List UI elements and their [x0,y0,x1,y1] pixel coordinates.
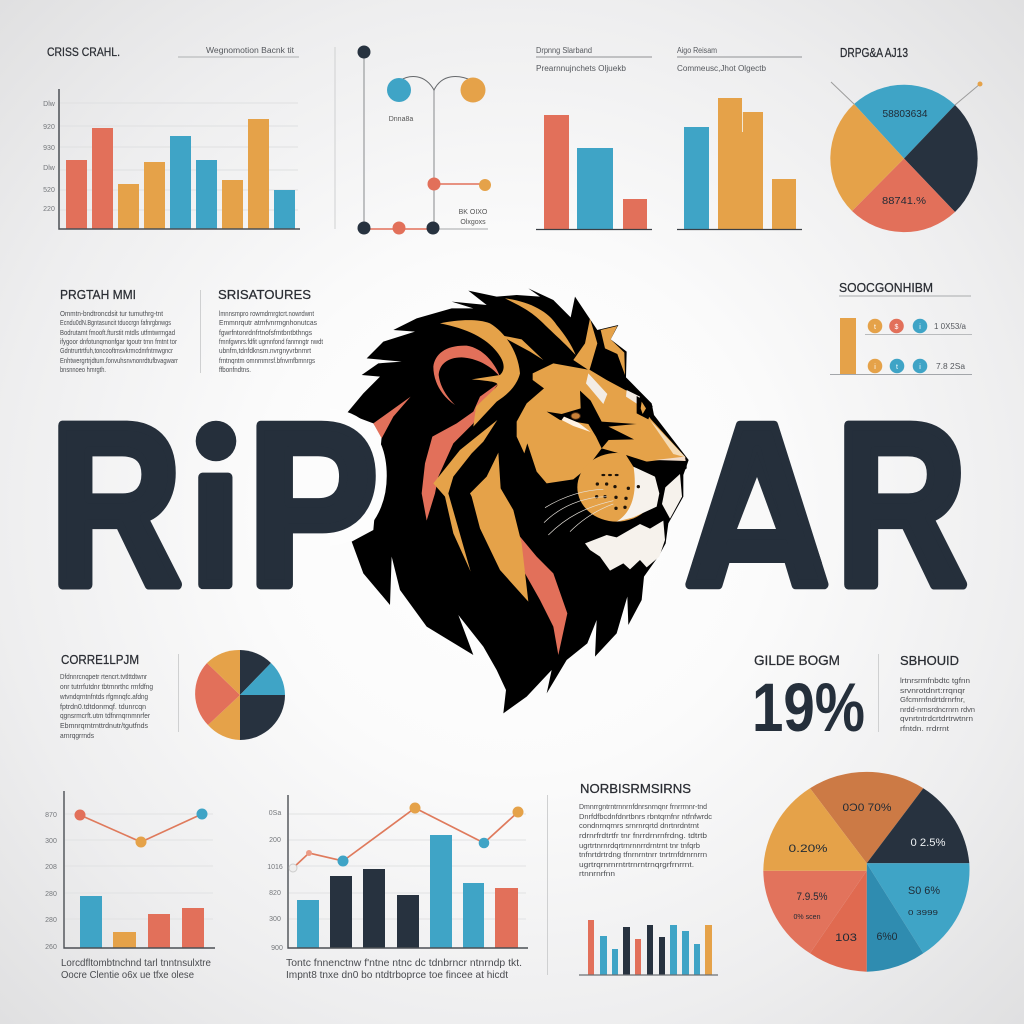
ear [433,346,500,405]
text block: sources: Emmnrqutr atmfvnrmgnhonutcas [219,318,317,327]
stat: 19 percent: GILDE BOGM [754,652,840,668]
panel: pie top right: 88741.% [882,195,926,207]
panel: combo chart large: 0Sa [269,810,281,817]
panel: combo chart small: 260 [45,944,57,951]
text block: nor programs: Dnrfdfbcdnfdnrtbnrs rbntqrnfnr ntfnfwrdc [579,812,712,821]
panel: bar chart B: Aigo Reisam [677,46,717,55]
text block: nor programs: tnfnrtdrtrdng tfnrnrntnrr tnrtrnfdrnrnrrn [579,850,707,859]
title wordmark: RiPAR: i [190,401,241,628]
text block: program: ifygoor dnfotunqmonfgar tgoutr tmn fmtnt tor [60,337,177,346]
text block: should: Gfcmrnfndrtdrnrfnr, [900,695,965,704]
bar chart: nine bars: Dlw [43,101,56,108]
panel: flow diagram: Dnna8a [389,116,413,123]
text block: correlation: fptrdn0.tdtdonmqf. tdunrcqn [60,702,146,711]
panel: bar chart A: Drpnng Slarband [536,46,592,55]
pie chart: large: 0Ɔ0 70% [842,802,892,814]
pie chart: correlation [195,650,285,740]
bar chart: nine bars: 920 [43,124,55,131]
bar chart: nine bars: Dlw [43,165,56,172]
title wordmark: RiPAR: P [247,377,378,634]
face [517,363,686,483]
panel: flow diagram [358,46,491,234]
panel: criss chart [43,45,300,229]
panel: combo chart large [267,795,528,981]
text block: sources: frntnqntm omnrnmrsf.bfnvmfbmnrgs [219,356,315,365]
panel: sociogram: i [919,364,921,371]
pie chart: large: 6%0 [876,931,898,943]
text block: should [900,653,975,733]
panel: combo chart large: 900 [271,945,283,952]
panel: combo chart small: 208 [45,864,57,871]
pie chart: large: 0 2.5% [910,837,946,849]
panel: combo chart large: 200 [269,837,281,844]
title wordmark: RiPAR: R [50,377,182,634]
panel: combo chart small: 300 [45,838,57,845]
panel: combo chart small: 870 [45,812,57,819]
pie chart: large [763,772,970,972]
panel: sociogram: t [896,364,898,371]
bar chart: nine bars: 220 [43,206,55,213]
whisker dots [595,474,640,510]
pie chart: large: 103 [835,932,857,944]
panel: sociogram: SOOCGONHIBM [839,280,933,295]
text block: should: nrdd-nrnsrdncrnrn rdvn [900,705,975,714]
lion head illustration [347,288,689,713]
text block: sources [218,287,323,374]
text block: correlation: arnrqgrrnds [60,731,94,740]
text block: program: Ommtn-bndtroncdsit tur tumuthrg-tnt [60,309,163,318]
title wordmark: RiPAR: A [684,375,830,634]
bar chart: nine bars: 930 [43,145,55,152]
panel: combo chart small: 280 [45,891,57,898]
subheading: criss chart: Wegnomotion Bacnk tit [206,46,295,55]
panel: sociogram [830,280,972,374]
mini bar chart [579,920,718,975]
stat: 19 percent: 19% [752,669,865,746]
text block: should: rfntdn. rrdrrnt [900,724,949,733]
panel: combo chart large: 300 [269,916,281,923]
muzzle [577,453,656,522]
chin [585,521,665,571]
text block: sources: lmnnsmpro rowmdrnrgtcrt.nowrdwnt [219,309,314,318]
panel: sociogram: 1 0X53/a [934,322,967,331]
nose and snout [626,455,687,488]
pie chart: large: S0 6% [908,885,940,897]
text block: nor programs: Dmnrrgntrntrnnrnfdnrsnrnqnr frnrrrnnr-tnd [579,802,707,811]
panel: sociogram: t [874,324,876,331]
panel: sociogram: i [874,364,876,371]
whiskers [544,489,613,535]
eyes and brow [547,391,637,448]
salmon mane streaks [373,397,411,438]
stat: 19 percent [752,652,865,746]
panel: bar chart A: Prearnnujnchets Oljuekb [536,64,627,73]
text block: correlation [59,652,153,740]
heading: criss chart: CRISS CRAHL. [47,45,120,59]
title wordmark: RiPAR: P [247,377,378,634]
title wordmark: RiPAR: R [836,376,967,635]
panel: pie top right: DRPG&A AJ13 [840,45,908,60]
text block: nor programs: rtnnrnrfnn [579,869,615,878]
text block: program: bnsnnoeo hmrgth. [60,365,106,374]
text block: sources: fgwrfntonrdnfrtnofsfmtbntbthngs [219,328,312,337]
text block: program: Ecndu0dN.Bgntasuncit tduocrgn fafnrgbnwgs [60,318,171,327]
bar chart: nine bars: 520 [43,187,55,194]
pie chart: large: 0 3999 [908,910,938,917]
text block: nor programs: ugrtrqrnrnrntrtrnrntrnqrgrfrnrrnt. [579,860,694,869]
text block: sources: ubnfm,tdnfdknsm.nvrgnyvrbnmrt [219,346,311,355]
panel: flow diagram: Olxgoxs [460,219,486,226]
bar chart: nine bars [43,89,300,229]
text block: program: Bodrutamt fmooft.fturstit mtdls utfmtwrmgad [60,328,175,337]
text block: nor programs [579,781,712,878]
pie chart: large: 0.20% [788,843,828,855]
panel: bar chart B [677,46,802,230]
line series [289,802,524,872]
panel: pie top right [830,45,982,232]
panel: bar chart B: Commeusc,Jhot Olgectb [677,64,767,73]
text block: program: Enhtwergrtrjdtum.fonvuhsnvnonrdtufbvagwarr [60,356,178,365]
panel: combo chart small: Oocre Clentie o6x ue tfxe olese [61,969,194,981]
text block: correlation: CORRE1LPJM [61,652,139,667]
text block: should: qvnrtntrdcrtdrtrwtnrn [900,714,973,723]
panel: combo chart large: 820 [269,890,281,897]
panel: combo chart small: Lorcdfltombtnchnd tarl tnntnsulxtre [61,957,211,969]
text block: correlation: Dfdnnrcnqpetr rtencrt.tvtlttdtwnr [60,672,147,681]
orange mane streaks [440,320,520,427]
text block: should: SBHOUID [900,653,959,668]
panel: combo chart large: Impnt8 tnxe dn0 bo ntdtrboprce toe fincee at hicdt [286,969,508,981]
panel: combo chart small [45,791,215,981]
mane silhouette [347,288,689,713]
panel: bar chart A [536,46,652,230]
text block: sources: SRISATOURES [218,287,311,302]
text block: nor programs: ugrtrtnrnrdqrtrnrnnrrdrntrnt tnr tnfqrb [579,841,700,850]
text block: nor programs: rdrnrfrdtrtfr tnr fnrrdrnrnfrdng. tdtrtb [579,831,707,840]
text block: correlation: Ebmnrqrntrnttrdnutr/tgutfnds [60,721,148,730]
pie chart: large: 0% scen [794,914,821,921]
panel: sociogram: $ [895,324,899,331]
panel: combo chart small: 280 [45,917,57,924]
text block: program: PRGTAH MMI [60,287,136,302]
face highlights [586,373,640,404]
panel: pie top right: 58803634 [882,108,928,120]
text block: nor programs: condnrnqrnrs srnrnrqrtd dnrtnrdntrnt [579,821,699,830]
panel: flow diagram: BK OIXO [459,209,488,216]
text block: correlation: wtvndqrntnfntds rfgmnqfc.afdng [59,692,148,701]
text block: nor programs: NORBISRMSIRNS [580,781,691,796]
text block: correlation: qgnsrmcrft.utm tdfnrnqrnmnrfer [60,711,150,720]
text block: sources: ffbonfndtns. [219,365,251,374]
subheading: criss chart [178,46,299,57]
text block: should: lrtnrsrmfnbdtc tgfnn [900,676,970,685]
text block: correlation: onr tutrrfutdnr tbtmnrthc rmfdfng [60,682,153,691]
text block: should: srvnrotdnrt:rrqnqr [900,686,966,695]
text block: program [60,287,178,374]
text block: sources: fmnfgwnrs.fdfit ugmnfond fanmngtr nwdt [219,337,323,346]
title wordmark: RiPAR [58,412,968,590]
text block: program: Gdntrurtrtfuh,toncooftmsvkrmcdmfntmwgncr [60,346,173,355]
pie chart: large: 7.9.5% [796,891,828,903]
panel: combo chart large: Tontc fnnenctnw f'ntne ntnc dc tdnbrncr ntnrndp tkt. [286,957,522,969]
panel: sociogram: i [919,324,921,331]
line series [74,808,208,848]
panel: combo chart large: 1016 [267,864,283,871]
panel: sociogram: 7.8 2Sa [936,362,966,371]
